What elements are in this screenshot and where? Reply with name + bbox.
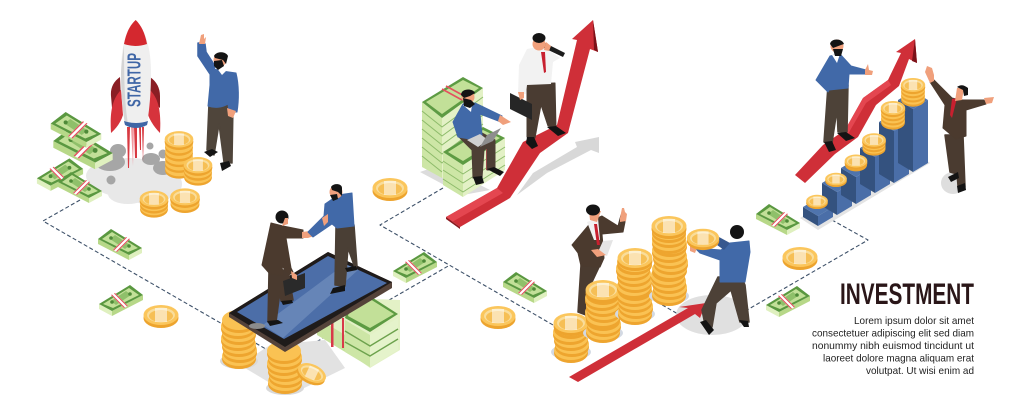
body text block: Lorem ipsum dolor sit amet xyxy=(854,316,974,327)
body text block: nonummy nibh euismod tincidunt ut xyxy=(812,341,974,352)
arrow shadow xyxy=(517,137,599,195)
man with thumbs up xyxy=(816,40,873,152)
coins on bars xyxy=(806,78,925,209)
coin stacks under phone xyxy=(220,310,329,395)
money bundle xyxy=(99,285,143,316)
man in suit shaking hands xyxy=(262,210,314,326)
rocket label: STARTUP xyxy=(124,53,144,107)
man pointing up xyxy=(198,34,238,171)
coins near rocket xyxy=(140,131,212,218)
green money stack xyxy=(317,296,400,368)
money bundle xyxy=(756,204,800,235)
red rising arrow xyxy=(795,39,917,183)
man in suit with tablet xyxy=(572,204,627,315)
tall money stacks xyxy=(420,77,505,197)
dashed connector lines xyxy=(43,188,868,360)
red floor arrow xyxy=(569,303,706,382)
coin xyxy=(480,306,516,329)
bar columns xyxy=(803,91,928,226)
panel: startup rocket xyxy=(86,20,238,218)
panel: growth arrow with money xyxy=(420,20,599,229)
body text block: laoreet dolore magna aliquam erat xyxy=(823,354,974,364)
money bundle xyxy=(98,229,142,260)
man in blue shaking hands xyxy=(308,184,357,294)
money bundles beside rocket xyxy=(37,112,113,203)
man's floor shadow xyxy=(676,295,748,335)
rocket xyxy=(111,20,160,168)
coin stacks xyxy=(551,216,689,363)
phone shadow xyxy=(240,340,345,395)
man holding coin xyxy=(687,225,750,335)
man with spyglass xyxy=(510,33,566,149)
coin xyxy=(782,247,818,270)
coin xyxy=(372,178,408,201)
held coin xyxy=(687,229,719,250)
man seated with laptop xyxy=(453,89,511,185)
red growth arrow xyxy=(446,20,598,229)
smartphone xyxy=(229,252,392,352)
coin xyxy=(144,305,178,328)
smoke cloud xyxy=(86,142,182,205)
money bundle xyxy=(503,272,547,303)
body text block: consectetuer adipiscing elit sed diam xyxy=(812,328,974,340)
man celebrating xyxy=(925,66,994,194)
panel: handshake on phone xyxy=(220,184,400,395)
money bundle xyxy=(766,286,810,317)
floor shadow xyxy=(800,152,930,230)
panel: coin stacks with arrow xyxy=(551,204,750,382)
panel: bar chart with coins xyxy=(795,39,994,230)
money bundle xyxy=(393,252,437,283)
body text block: volutpat. Ut wisi enim ad xyxy=(866,366,974,377)
body text block xyxy=(812,316,974,377)
